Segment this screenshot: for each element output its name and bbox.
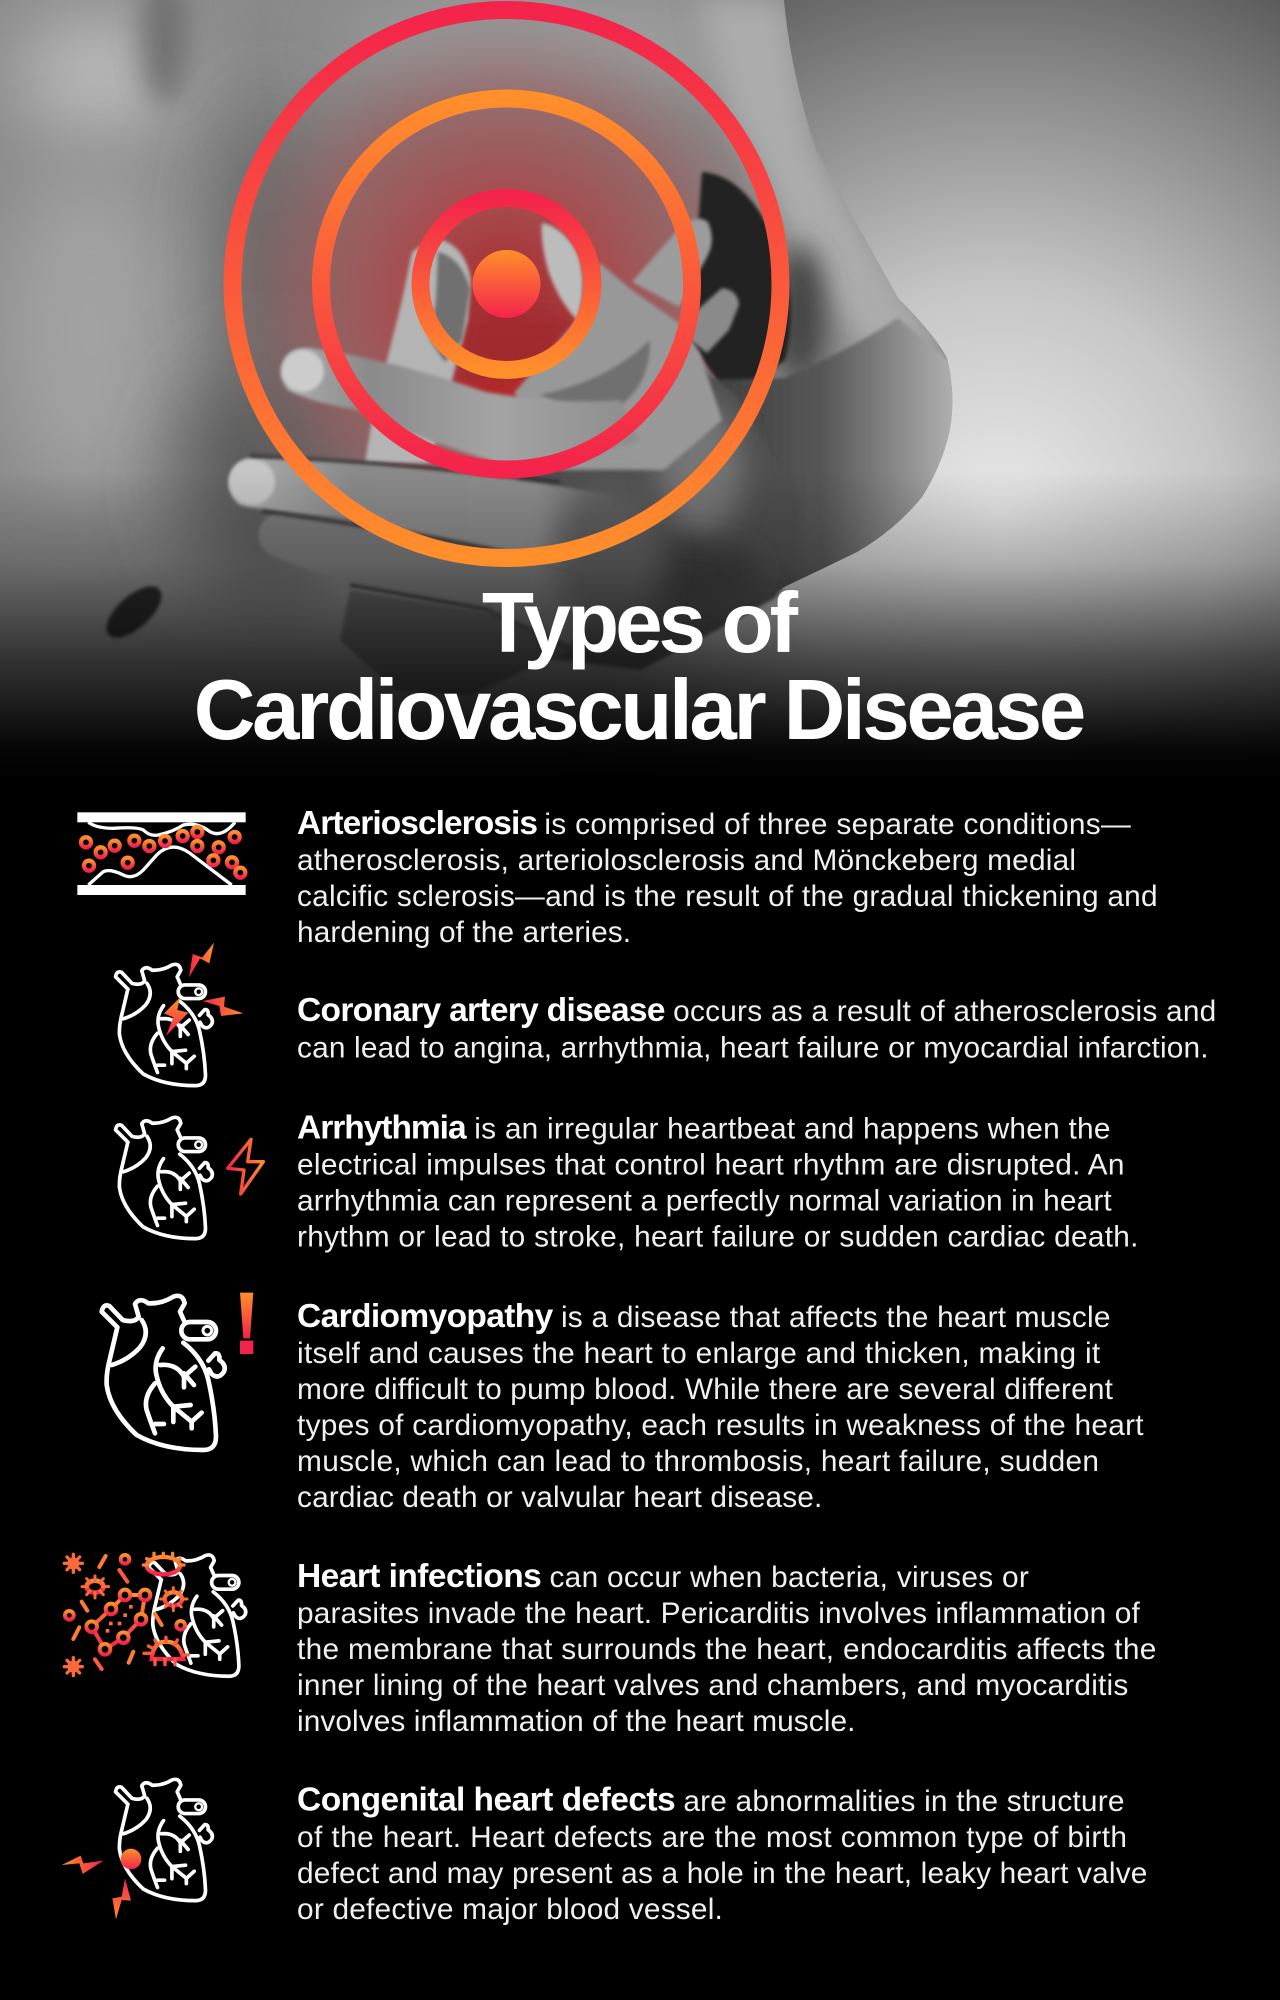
- text: heart infections: [297, 1558, 1156, 1738]
- text: coronary artery disease: [297, 992, 1216, 1064]
- text: congenital heart defects: defect and may present as a hole in the heart, leaky heart valve: [297, 1857, 1147, 1890]
- text: arteriosclerosis: atherosclerosis, arteriolosclerosis and Mönckeberg medial: [297, 844, 1076, 877]
- text: congenital heart defects: of the heart. Heart defects are the most common type of birth: [297, 1821, 1127, 1854]
- text: coronary artery disease: Coronary artery disease: [297, 992, 665, 1029]
- text: cardiomyopathy: muscle, which can lead to thrombosis, heart failure, sudden: [297, 1445, 1099, 1478]
- icon: arrhythmia heart with bolt: [116, 1117, 263, 1239]
- text: heart infections: parasites invade the heart. Pericarditis involves inflammation of: [297, 1597, 1140, 1630]
- centre dot: [472, 250, 540, 318]
- text: cardiomyopathy: types of cardiomyopathy, each results in weakness of the heart: [297, 1409, 1144, 1442]
- icon: coronary heart with bolts: [116, 943, 243, 1086]
- title: [194, 576, 1086, 758]
- text: arrhythmia: rhythm or lead to stroke, heart failure or sudden cardiac death.: [297, 1221, 1138, 1254]
- text: heart infections: can occur when bacteria, viruses or: [549, 1561, 1029, 1594]
- text: heart infections: inner lining of the heart valves and chambers, and myocarditis: [297, 1669, 1128, 1702]
- text: arrhythmia: [297, 1109, 1138, 1254]
- text: arrhythmia: is an irregular heartbeat and happens when the: [474, 1112, 1110, 1145]
- text: cardiomyopathy: [297, 1298, 1144, 1514]
- text: congenital heart defects: or defective major blood vessel.: [297, 1893, 723, 1926]
- text: arteriosclerosis: Arteriosclerosis: [297, 805, 538, 842]
- icon: heart with microbes: [64, 1553, 246, 1676]
- icon: cardiomyopathy heart with exclamation: [102, 1293, 253, 1450]
- text: arrhythmia: arrhythmia can represent a perfectly normal variation in heart: [297, 1185, 1112, 1218]
- text: congenital heart defects: are abnormalities in the structure: [683, 1785, 1124, 1818]
- target rings: [232, 10, 780, 558]
- text: cardiomyopathy: Cardiomyopathy: [297, 1298, 554, 1335]
- text: coronary artery disease: occurs as a result of atherosclerosis and: [673, 995, 1216, 1028]
- title: Cardiovascular Disease: [194, 663, 1086, 758]
- text: arteriosclerosis: is comprised of three separate conditions—: [544, 808, 1131, 841]
- text: arrhythmia: Arrhythmia: [297, 1109, 467, 1146]
- text: cardiomyopathy: is a disease that affects the heart muscle: [561, 1301, 1110, 1334]
- text: arteriosclerosis: hardening of the arteries.: [297, 916, 631, 949]
- text: heart infections: the membrane that surrounds the heart, endocarditis affects the: [297, 1633, 1156, 1666]
- text: congenital heart defects: [297, 1781, 1147, 1926]
- text: cardiomyopathy: itself and causes the heart to enlarge and thicken, making it: [297, 1337, 1101, 1370]
- text: cardiomyopathy: more difficult to pump blood. While there are several different: [297, 1373, 1114, 1406]
- hero photo: hands on chest: [0, 0, 1280, 796]
- outer ring: [232, 10, 780, 558]
- text: cardiomyopathy: cardiac death or valvular heart disease.: [297, 1481, 822, 1514]
- icon: congenital heart with defect: [62, 1779, 212, 1919]
- text: heart infections: involves inflammation of the heart muscle.: [297, 1705, 855, 1738]
- middle ring: [321, 98, 692, 469]
- title: Types of: [482, 576, 799, 671]
- text: arrhythmia: electrical impulses that control heart rhythm are disrupted. An: [297, 1149, 1124, 1182]
- icon: artery with plaque: [77, 812, 246, 895]
- text: coronary artery disease: can lead to angina, arrhythmia, heart failure or myocardial infarction.: [297, 1031, 1209, 1064]
- inner ring: [420, 198, 592, 370]
- text: arteriosclerosis: [297, 805, 1158, 949]
- text: heart infections: Heart infections: [297, 1558, 542, 1595]
- text: congenital heart defects: Congenital heart defects: [297, 1781, 676, 1818]
- text: arteriosclerosis: calcific sclerosis—and is the result of the gradual thickening and: [297, 880, 1158, 913]
